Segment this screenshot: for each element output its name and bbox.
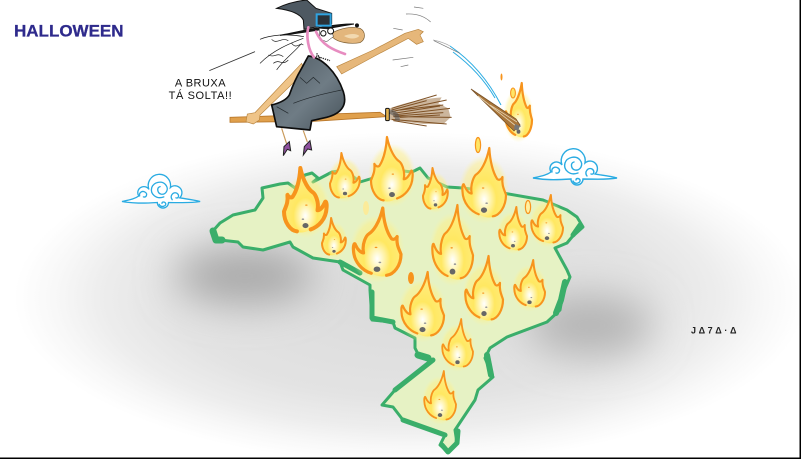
- flames on the map: [281, 137, 565, 425]
- speech text: [169, 78, 232, 102]
- meteor: broom stick on fire: [433, 40, 534, 142]
- title: HALLOWEEN: [14, 22, 124, 40]
- witch on a broomstick: [209, 0, 460, 156]
- signature: JΔ7Δ·Δ: [691, 326, 739, 336]
- cloud left: [122, 174, 200, 208]
- speech text: TÁ SOLTA!!: [169, 89, 232, 102]
- speech text: A BRUXA: [175, 78, 226, 90]
- cloud right: [533, 149, 617, 185]
- map of Brazil: [212, 168, 583, 452]
